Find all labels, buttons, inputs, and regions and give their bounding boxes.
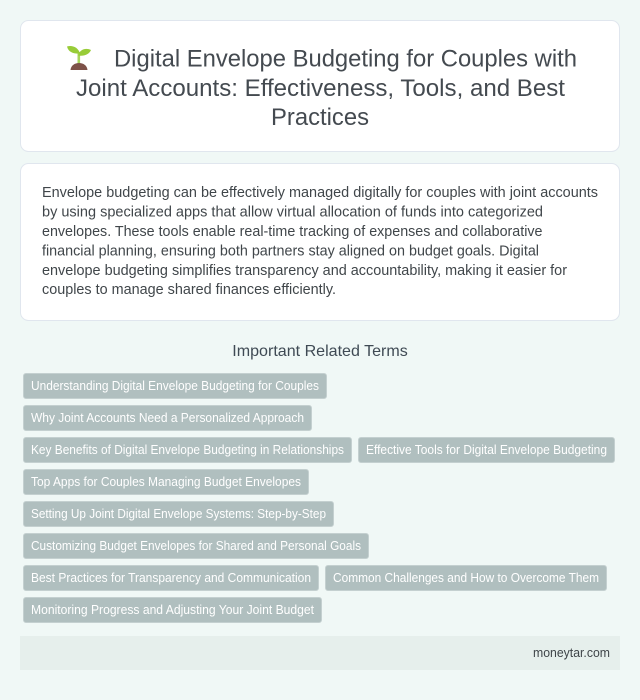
tag: Customizing Budget Envelopes for Shared and Personal Goals: [31, 539, 361, 553]
title: Joint Accounts: Effectiveness, Tools, and Best: [76, 75, 565, 102]
tag: [24, 534, 368, 558]
tag: Understanding Digital Envelope Budgeting for Couples: [31, 379, 319, 393]
title: Digital Envelope Budgeting for Couples with: [114, 46, 577, 73]
tag: [24, 598, 322, 622]
tag: Monitoring Progress and Adjusting Your Joint Budget: [31, 603, 315, 617]
panel: summary: [20, 164, 620, 320]
tag: Why Joint Accounts Need a Personalized Approach: [31, 411, 304, 425]
footer: moneytar.com: [533, 646, 610, 660]
tag: Top Apps for Couples Managing Budget Envelopes: [31, 475, 301, 489]
footer: [20, 636, 620, 670]
icon: seedling: [67, 46, 91, 70]
summary paragraph: [42, 185, 598, 298]
title: Practices: [271, 104, 369, 131]
tag: Key Benefits of Digital Envelope Budgeting in Relationships: [31, 443, 344, 457]
summary paragraph: financial planning, ensuring both partners stay aligned on budget goals. Digital: [42, 243, 539, 259]
summary paragraph: envelopes. These tools enable real-time tracking of expenses and collaborative: [42, 224, 542, 240]
summary paragraph: envelope budgeting simplifies transparency and accountability, making it easier for: [42, 263, 567, 279]
tag: [24, 406, 312, 430]
tag: [24, 502, 334, 526]
tag: [24, 438, 352, 462]
panel: title card: [20, 20, 620, 152]
summary paragraph: Envelope budgeting can be effectively managed digitally for couples with joint accounts: [42, 185, 598, 201]
tag: [24, 566, 318, 590]
tag: Effective Tools for Digital Envelope Budgeting: [366, 443, 607, 457]
summary paragraph: couples to manage shared finances efficiently.: [42, 282, 336, 298]
tag: [326, 566, 606, 590]
tag: Setting Up Joint Digital Envelope Systems: Step-by-Step: [31, 507, 326, 521]
tag: [358, 438, 614, 462]
title: [76, 46, 577, 131]
tag: [24, 470, 308, 494]
tag: [24, 374, 326, 398]
heading: related terms: Important Related Terms: [232, 343, 408, 360]
summary paragraph: by using specialized apps that allow virtual allocation of funds into categorized: [42, 204, 543, 220]
tag: Best Practices for Transparency and Communication: [31, 571, 311, 585]
tag: Common Challenges and How to Overcome Them: [333, 571, 599, 585]
